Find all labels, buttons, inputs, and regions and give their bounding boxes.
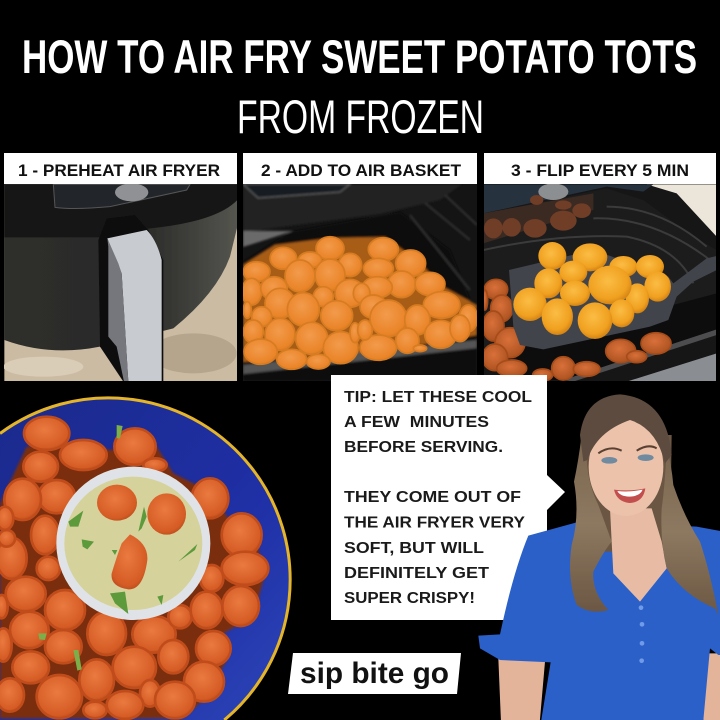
dipping sauce bowl xyxy=(56,467,210,620)
tip text: THEY COME OUT OF xyxy=(344,489,521,506)
blouse xyxy=(478,521,720,720)
step 3 heading xyxy=(484,153,716,184)
tip text: SOFT, BUT WILL xyxy=(344,540,484,557)
photo: air fryer with silver handle xyxy=(3,183,238,382)
panel: step 3 flip every 5 min xyxy=(482,153,717,382)
tip text xyxy=(344,389,532,607)
hair top xyxy=(580,394,672,463)
tots xyxy=(0,417,268,719)
step 1 heading: 1 - PREHEAT AIR FRYER xyxy=(18,162,220,180)
tip text: SUPER CRISPY! xyxy=(344,590,475,607)
subtitle: FROM FROZEN xyxy=(237,90,484,143)
logo: sip bite go xyxy=(288,653,461,694)
tip text: BEFORE SERVING. xyxy=(344,439,503,456)
tip text: A FEW MINUTES xyxy=(344,414,489,431)
photo: air fryer basket filled with frozen tots xyxy=(242,184,478,381)
panel: step 1 preheat air fryer xyxy=(3,153,238,382)
buttons xyxy=(639,605,644,663)
photo: smiling woman in blue blouse xyxy=(478,394,720,720)
logo: sip bite go: sip bite go xyxy=(300,657,449,690)
neck and chest xyxy=(610,508,667,602)
photo: blue plate of sweet potato tots with dipping sauce xyxy=(0,398,290,720)
smile xyxy=(614,488,645,503)
arms xyxy=(498,653,720,720)
step 2 heading xyxy=(243,153,477,184)
tip text: DEFINITELY GET xyxy=(344,565,490,582)
eyes and brows xyxy=(598,446,657,453)
step 1 heading xyxy=(4,153,237,184)
hair behind neck xyxy=(582,435,672,552)
panel: step 2 add to air basket xyxy=(242,153,478,381)
tip text: THE AIR FRYER VERY xyxy=(344,514,526,532)
plate xyxy=(0,398,290,720)
step 3 heading: 3 - FLIP EVERY 5 MIN xyxy=(511,162,689,180)
tip text: TIP: LET THESE COOL xyxy=(344,389,532,406)
step 2 heading: 2 - ADD TO AIR BASKET xyxy=(261,162,461,180)
spatula xyxy=(509,250,717,349)
photo: spatula flipping tots in the basket xyxy=(482,183,717,382)
callout: tip speech bubble xyxy=(331,375,565,620)
face xyxy=(589,417,663,516)
hair locks xyxy=(570,435,612,612)
